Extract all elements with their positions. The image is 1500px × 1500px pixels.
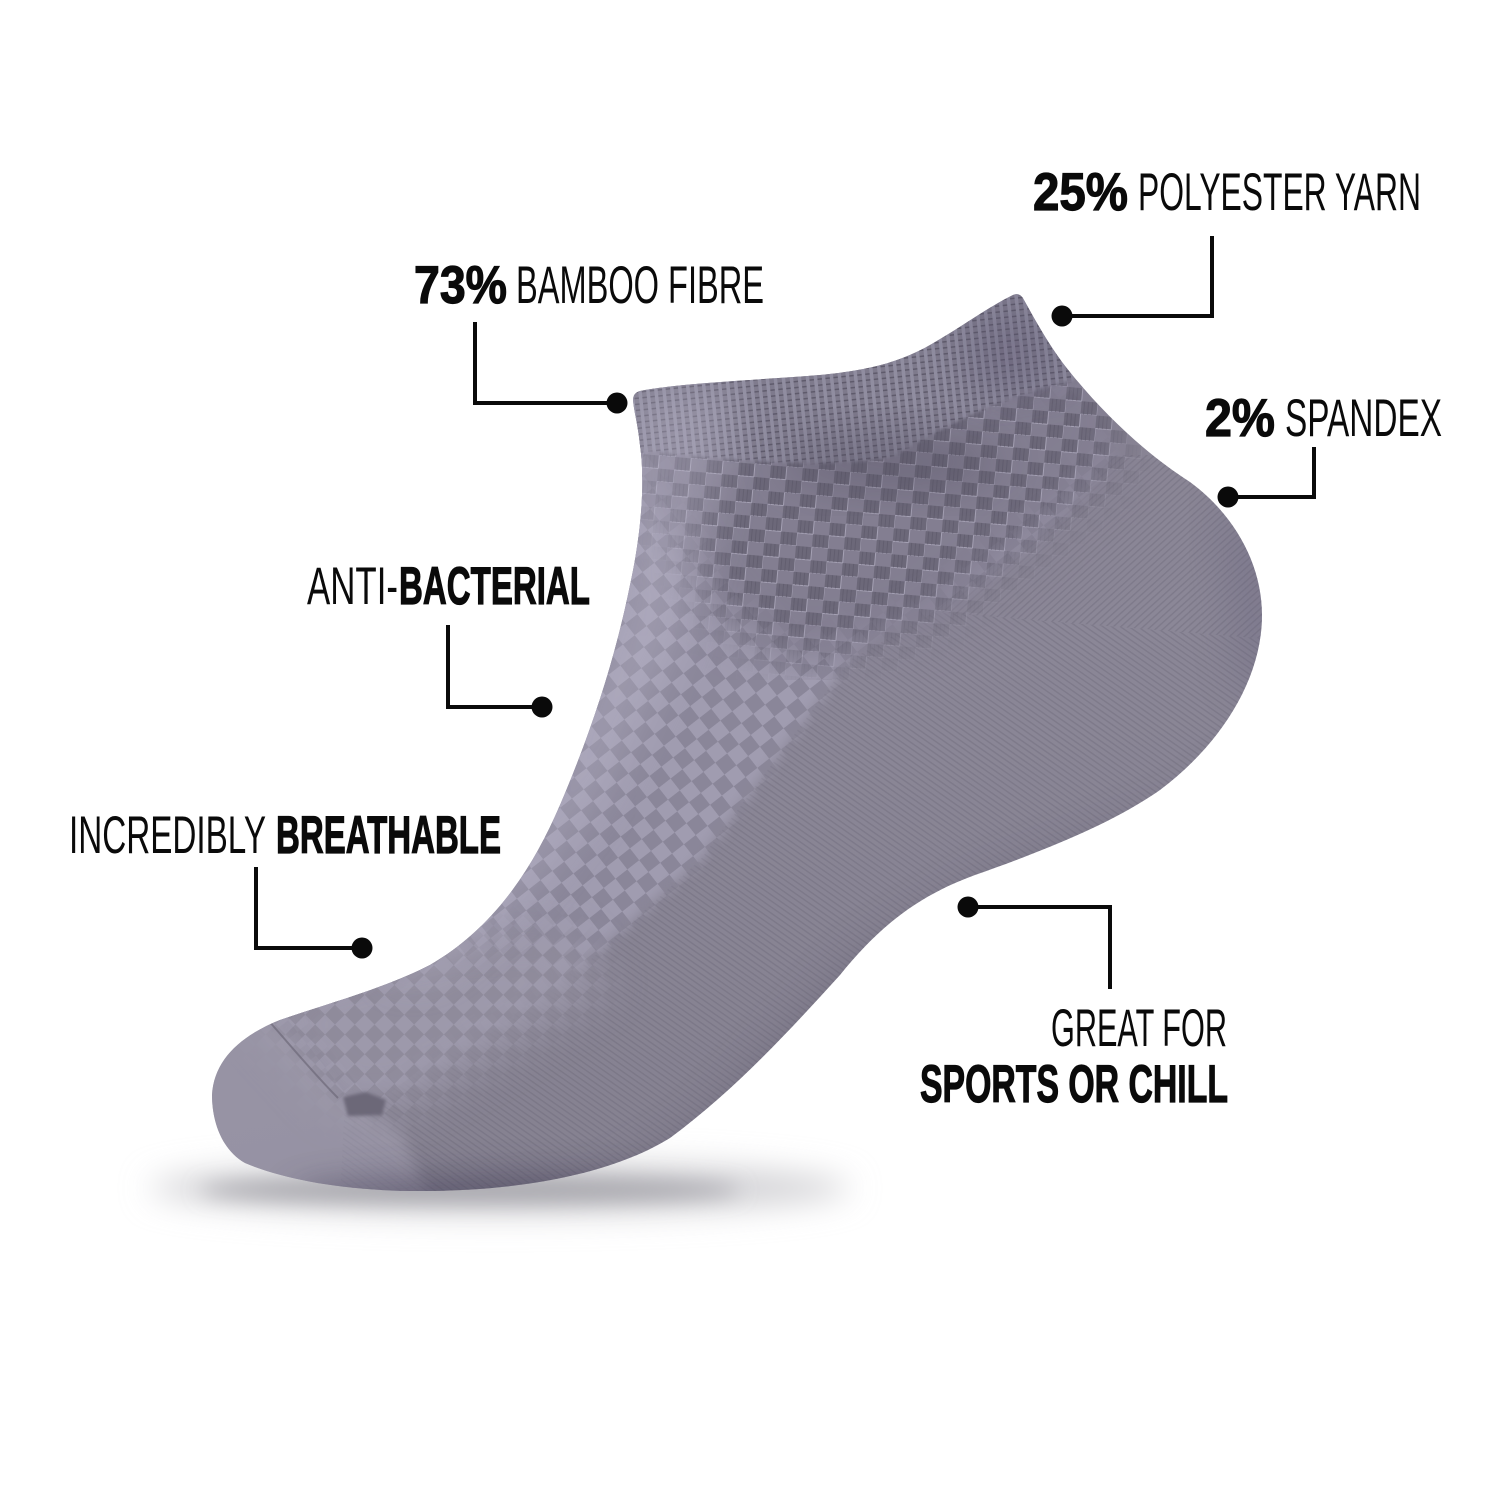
heel knit upper bbox=[956, 455, 1262, 638]
sole bottom shading bbox=[300, 1161, 616, 1191]
light left cuff and shaft edge bbox=[432, 382, 745, 964]
toe weave bbox=[273, 929, 608, 1120]
leader line bbox=[1228, 447, 1314, 497]
leader line bbox=[256, 867, 362, 948]
callout: great for sports or chill bbox=[920, 896, 1228, 1114]
toe shade mark bbox=[343, 1092, 386, 1116]
callout: incredibly breathable bbox=[69, 806, 501, 958]
label: 73% bbox=[414, 256, 507, 315]
sock base fabric bbox=[200, 280, 1280, 1210]
label: BACTERIAL bbox=[399, 557, 590, 616]
label bbox=[414, 256, 764, 315]
toe seam bbox=[268, 1020, 338, 1098]
dot bbox=[1052, 306, 1072, 326]
label bbox=[920, 999, 1228, 1114]
upper weave bbox=[600, 380, 1150, 680]
label bbox=[307, 557, 590, 616]
leader line bbox=[968, 907, 1110, 989]
dot bbox=[958, 896, 978, 918]
callout: 2% spandex bbox=[1205, 389, 1442, 508]
leader line bbox=[1062, 236, 1212, 316]
heel knit lower bbox=[398, 614, 1260, 1182]
label: INCREDIBLY bbox=[69, 806, 266, 865]
label bbox=[1033, 163, 1421, 222]
dot bbox=[532, 696, 552, 718]
label: 2% bbox=[1205, 389, 1275, 448]
callout: anti-bacterial bbox=[307, 557, 590, 718]
label bbox=[1205, 389, 1442, 448]
leader line bbox=[475, 322, 617, 403]
dark right cuff bbox=[962, 300, 1063, 400]
callout: 73% bamboo fibre bbox=[414, 256, 764, 414]
leader line bbox=[448, 625, 542, 707]
shaft weave bbox=[276, 447, 1098, 1022]
label: 25% bbox=[1033, 163, 1128, 222]
label: ANTI- bbox=[307, 557, 398, 616]
outer soft shadow bbox=[150, 1162, 850, 1214]
toe tip bbox=[212, 1026, 423, 1191]
heel edge shading bbox=[1232, 531, 1262, 677]
callout: 25% polyester yarn bbox=[1033, 163, 1421, 326]
ground shadow bbox=[150, 1162, 850, 1214]
dot bbox=[352, 938, 372, 958]
label: BREATHABLE bbox=[276, 806, 501, 865]
cuff shadow bbox=[780, 432, 1000, 492]
label: GREAT FOR bbox=[1051, 999, 1227, 1058]
ribbed cuff bbox=[633, 294, 1074, 464]
dot bbox=[606, 392, 628, 414]
inner contact shadow bbox=[200, 1177, 740, 1203]
label: BAMBOO FIBRE bbox=[516, 256, 764, 315]
arch and sole shading bbox=[690, 956, 856, 1122]
sock illustration bbox=[200, 280, 1280, 1220]
label: SPORTS OR CHILL bbox=[920, 1055, 1228, 1114]
dot bbox=[1218, 486, 1238, 508]
